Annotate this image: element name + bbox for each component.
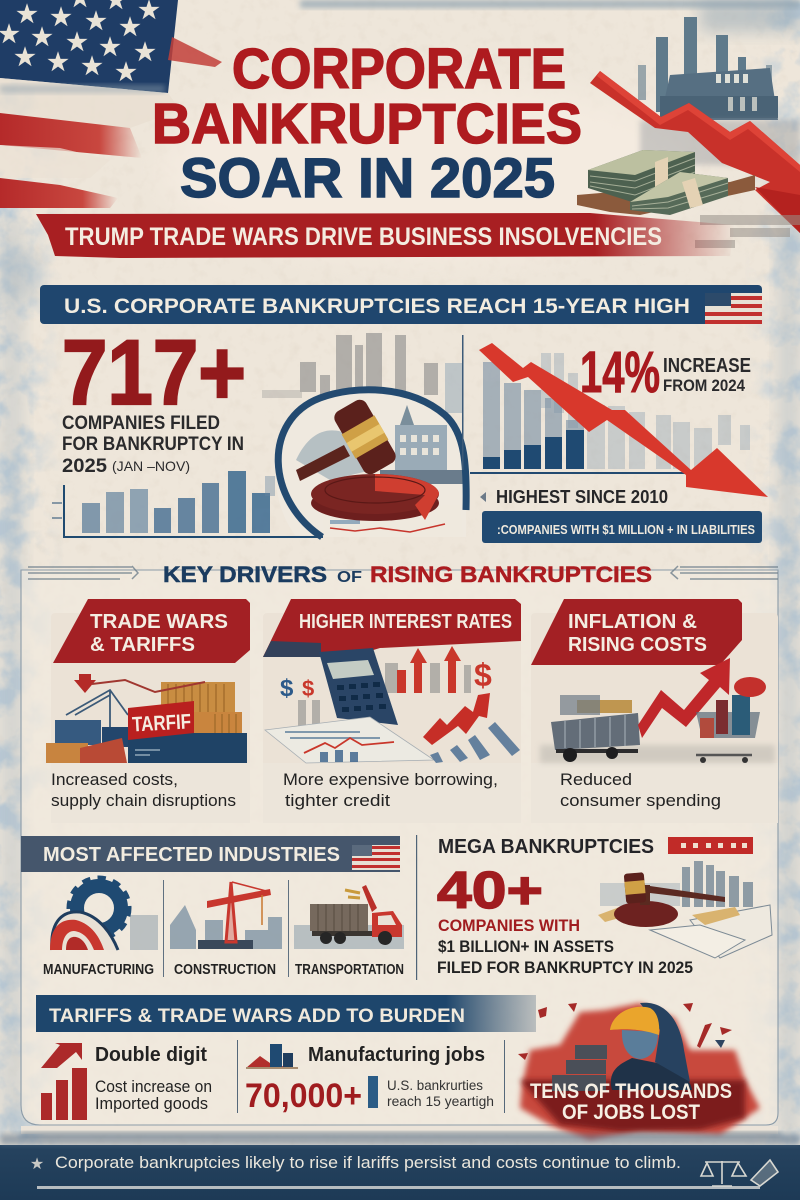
illustration: containers and tariff sign: [46, 674, 247, 763]
text: more expensive borrowing: More expensive borrowing,: [283, 770, 498, 789]
text: companies with $1 billion: COMPANIES WITH: [438, 916, 580, 935]
text: increased costs: [51, 770, 236, 810]
illustration: gavel with papers: [598, 861, 772, 958]
ribbon: trade wars: TRADE WARS: [90, 611, 228, 633]
icon: debris: [518, 1003, 732, 1060]
icon: transportation truck: [294, 885, 404, 949]
heading: key drivers: [163, 562, 652, 587]
icon: star: ★: [30, 1156, 44, 1173]
ribbon: higher interest rates: [263, 599, 521, 657]
label: companies filed: (JAN –NOV): [112, 458, 190, 474]
icon: scales and paper: [701, 1160, 778, 1186]
statistic: 14% increase: [580, 340, 751, 405]
flag: top left corner: ★: [134, 39, 156, 66]
text: tens of thousands of jobs lost: [530, 1080, 732, 1124]
text: increased costs: Increased costs,: [51, 770, 178, 789]
text: companies with $1 billion: $1 BILLION+ IN ASSETS: [438, 937, 614, 956]
flag: top left corner: ★: [99, 34, 121, 61]
label: transportation: TRANSPORTATION: [295, 962, 404, 978]
illustration: falling red arrow: [590, 71, 800, 233]
illustration: calculator and charts: $: [302, 676, 314, 701]
header: tariffs: TARIFFS & TRADE WARS ADD TO BURDEN: [49, 1006, 465, 1027]
label: companies filed: COMPANIES FILED: [62, 413, 220, 434]
text: footer note: Corporate bankruptcies likely to rise if lariffs persist and costs continue to climb.: [55, 1153, 681, 1172]
statistic: 14% increase: FROM 2024: [663, 376, 745, 395]
heading: key drivers: OF: [337, 569, 362, 586]
header: tariffs: [36, 995, 536, 1032]
flag: top left corner: ★: [81, 53, 103, 80]
icon: manufacturing gear: [50, 879, 158, 950]
flag: top left corner: ★: [85, 8, 107, 35]
card: inflation and rising costs: [531, 599, 778, 823]
illustration: money stacks on pallet: [577, 150, 755, 215]
illustration: containers and tariff sign: TARFIF: [132, 710, 192, 736]
text: reduced consumer spending: consumer spending: [560, 791, 721, 810]
text: bankruptcies reach high: U.S. bankrurties: [387, 1077, 483, 1093]
label: companies filed: [62, 413, 244, 477]
ribbon: higher interest rates: HIGHER INTEREST RATES: [299, 611, 512, 633]
statistic: 14% increase: 14%: [580, 340, 660, 405]
text: double digit: Cost increase on: [95, 1077, 212, 1096]
flag: top left corner: ★: [16, 1, 38, 28]
illustration: grey city skyline: [262, 333, 462, 413]
illustration: calculator and charts: [265, 646, 520, 763]
flag: top left corner: ★: [115, 59, 137, 86]
section header: 15-year high: [40, 285, 762, 324]
text: tens of thousands of jobs lost: OF JOBS LOST: [562, 1101, 700, 1124]
title: [152, 37, 582, 209]
illustration: worker with hard hat: [552, 1003, 692, 1091]
text: more expensive borrowing: [283, 770, 498, 810]
illustration: calculator and charts: $: [280, 675, 294, 702]
bar chart: filings: [52, 471, 323, 538]
card: trade wars and tariffs: [46, 599, 250, 823]
footer band: [0, 1134, 800, 1200]
panel: 14% increase chart: [462, 335, 768, 543]
statistic: 717+: 717+: [62, 322, 246, 424]
panel: key drivers frame: [21, 562, 781, 1137]
bar chart: rising bars: [470, 353, 750, 474]
text: tens of thousands of jobs lost: TENS OF THOUSANDS: [530, 1080, 732, 1103]
note: liabilities pill: :COMPANIES WITH $1 MILLION + IN LIABILITIES: [497, 522, 755, 537]
flag: top left corner: ★: [14, 44, 36, 71]
panel: most affected industries: [21, 836, 404, 978]
text: bankruptcies reach high: [387, 1077, 494, 1109]
arrow: red falling trend: [479, 343, 768, 497]
header: most affected: MOST AFFECTED INDUSTRIES: [43, 844, 340, 866]
panel: tariffs add to burden: [36, 995, 536, 1120]
illustration: calculator and charts: $: [474, 657, 492, 693]
text: more expensive borrowing: tighter credit: [285, 791, 390, 810]
statistic: 70,000+: 70,000+: [245, 1077, 362, 1115]
subtitle banner: TRUMP TRADE WARS DRIVE BUSINESS INSOLVENCIES: [65, 223, 662, 251]
heading: key drivers: RISING BANKRUPTCIES: [370, 562, 652, 587]
label: companies filed: 2025: [62, 456, 107, 477]
ribbon: inflation: RISING COSTS: [568, 634, 707, 656]
illustration: brick wall behind banner: [695, 215, 800, 248]
text: companies with $1 billion: [437, 916, 693, 977]
flag: top left corner: [0, 0, 222, 208]
icon: manufacturing bars: [246, 1044, 298, 1069]
illustration: gavel medallion: [276, 390, 466, 537]
panel: mega bankruptcies: [437, 836, 772, 977]
tag: red film strip: [668, 837, 753, 854]
label: construction: CONSTRUCTION: [174, 962, 276, 978]
label: companies filed: FOR BANKRUPTCY IN: [62, 434, 244, 455]
text: manufacturing jobs: Manufacturing jobs: [308, 1044, 485, 1066]
flag: top left corner: ★: [66, 29, 88, 56]
icon: construction crane: [170, 882, 282, 949]
label: manufacturing: MANUFACTURING: [43, 962, 154, 978]
panel: jobs lost splash: [518, 1003, 760, 1140]
label: highest since 2010: HIGHEST SINCE 2010: [496, 487, 668, 507]
text: reduced consumer spending: [560, 770, 721, 810]
flag: top left corner: ★: [119, 14, 141, 41]
illustration: truck, arrow and cart: [540, 658, 775, 763]
heading: key drivers: KEY DRIVERS: [163, 562, 327, 587]
section header: 15-year high: U.S. CORPORATE BANKRUPTCIES REACH 15-YEAR HIGH: [64, 295, 690, 318]
flag: top left corner: ★: [47, 49, 69, 76]
illustration: factory skyline: [638, 17, 800, 165]
heading: mega bankruptcies: MEGA BANKRUPTCIES: [438, 836, 654, 858]
icon: rising cost bars: [41, 1043, 87, 1120]
text: reduced consumer spending: Reduced: [560, 770, 632, 789]
ribbon: trade wars: & TARIFFS: [90, 634, 195, 656]
panel: 717+ companies: [52, 322, 466, 538]
title: BANKRUPTCIES: [152, 92, 582, 156]
flag: top left corner: ★: [31, 24, 53, 51]
text: companies with $1 billion: FILED FOR BANKRUPTCY IN 2025: [437, 958, 693, 977]
title: SOAR IN 2025: [180, 146, 555, 209]
ribbon: trade wars: [53, 599, 250, 663]
statistic: 14% increase: INCREASE: [663, 355, 751, 377]
text: double digit: [95, 1044, 212, 1113]
header: most affected: [21, 836, 400, 872]
card: higher interest rates: [263, 599, 521, 823]
statistic: 40+: 40+: [437, 862, 543, 920]
flag: top left corner: ★: [50, 4, 72, 31]
text: double digit: Imported goods: [95, 1094, 208, 1113]
text: double digit: Double digit: [95, 1044, 207, 1066]
text: bankruptcies reach high: reach 15 yeartigh: [387, 1093, 494, 1109]
text: increased costs: supply chain disruptions: [51, 791, 236, 810]
note: liabilities pill: [482, 511, 762, 543]
subtitle banner: [36, 213, 735, 258]
ribbon: inflation: INFLATION &: [568, 611, 697, 633]
title: CORPORATE: [232, 37, 566, 101]
ribbon: inflation: [531, 599, 742, 665]
